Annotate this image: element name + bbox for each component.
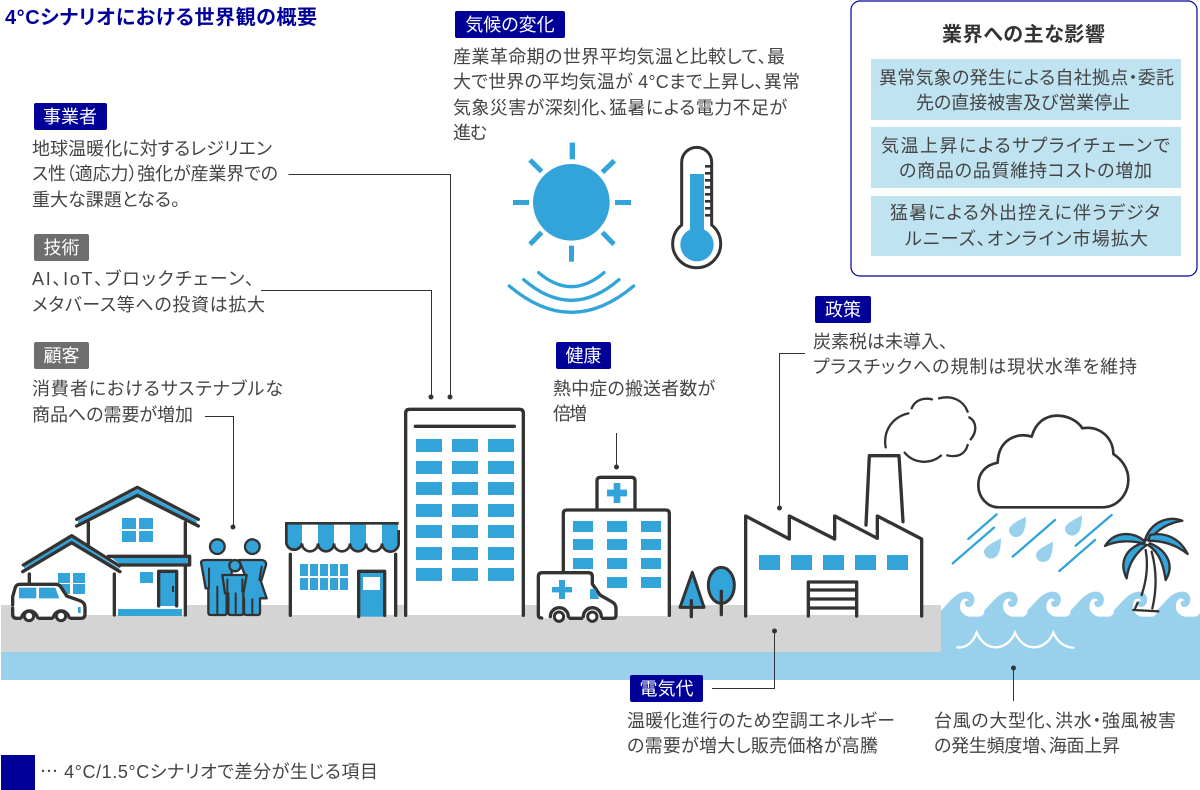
icon: palm tree [1105, 519, 1188, 611]
leader line: 電気代 [712, 628, 777, 688]
tag: 政策 [815, 296, 871, 323]
impact 3 [871, 196, 1181, 256]
panel: 顧客 [32, 342, 283, 425]
tag: 顧客 [34, 342, 89, 369]
icon: shop [286, 523, 399, 617]
text: 顧客 [32, 378, 283, 425]
text: 事業者: ス性（適応力）強化が産業界での [32, 164, 278, 184]
leader line: 健康 [614, 433, 619, 470]
leader line: 台風 [1011, 666, 1016, 701]
text: 台風: の発生頻度増、海面上昇 [934, 736, 1120, 756]
tag: 政策: 政策 [825, 300, 861, 320]
text: 気候の変化: 気象災害が深刻化、猛暑による電力不足が [453, 98, 787, 118]
tag: 健康: 健康 [566, 346, 602, 366]
impact 2: 気温上昇によるサプライチェーンで [881, 136, 1170, 156]
text: 健康: 倍増 [553, 404, 587, 424]
text: 技術: メタバース等への投資は拡大 [32, 295, 265, 315]
text: 電気代: 温暖化進行のため空調エネルギー [627, 711, 895, 731]
tag: 技術 [34, 234, 89, 261]
icon: factory [746, 397, 975, 616]
text: 政策 [813, 332, 1137, 377]
leader line: 事業者 [288, 174, 452, 400]
text: 電気代: の需要が増大し販売価格が高騰 [627, 736, 878, 756]
water band [1, 652, 1199, 680]
text: 健康: 熱中症の搬送者数が [553, 379, 715, 399]
text: 政策: プラスチックへの規制は現状水準を維持 [813, 357, 1137, 377]
text: 健康 [553, 379, 715, 424]
text: 顧客: 商品への需要が増加 [32, 405, 193, 425]
text: 事業者 [32, 139, 278, 210]
impact 3: 猛暑による外出控えに伴うデジタ [890, 203, 1160, 223]
tag: 技術: 技術 [44, 238, 80, 258]
text: 気候の変化: 大で世界の平均気温が 4°Cまで上昇し、異常 [453, 72, 800, 92]
panel: 電気代 [627, 675, 895, 756]
text: 台風 [934, 711, 1176, 756]
icon: hospital [563, 477, 669, 616]
impact 3: ルニーズ、オンライン市場拡大 [905, 229, 1148, 249]
text: 政策: 炭素税は未導入、 [813, 332, 948, 352]
panel: 政策 [813, 296, 1137, 377]
tag: 気候の変化: 気候の変化 [465, 15, 555, 35]
panel: 業界への主な影響 [851, 1, 1197, 276]
impact 1: 異常気象の発生による自社拠点・委託 [879, 68, 1174, 88]
sea and waves [941, 592, 1200, 680]
panel: 健康 [553, 342, 715, 424]
legend: ⋯ 4°C/1.5°Cシナリオで差分が生じる項目 [40, 758, 378, 784]
text: 気候の変化: 進む [453, 123, 487, 143]
panel: 気候の変化 [453, 11, 800, 143]
leader line: 技術 [261, 290, 434, 400]
text: 顧客: 消費者におけるサステナブルな [32, 378, 283, 399]
leader line: 顧客 [205, 416, 236, 530]
icon: storm cloud and rain [953, 416, 1128, 571]
tag: 健康 [556, 342, 611, 369]
legend [1, 755, 378, 790]
icon: house [23, 487, 198, 616]
impact 1 [871, 59, 1181, 120]
leader line: 政策 [777, 354, 805, 510]
icon: sun [509, 143, 634, 312]
tag: 電気代 [630, 675, 703, 702]
text: 気候の変化 [453, 47, 800, 143]
text: 事業者: 地球温暖化に対するレジリエン [32, 139, 272, 159]
icon: ambulance [538, 573, 616, 621]
panel: 事業者 [32, 103, 278, 210]
text: 技術 [32, 268, 265, 315]
tag: 事業者 [34, 103, 107, 130]
panel heading: 業界への主な影響 [942, 23, 1105, 46]
text: 事業者: 重大な課題となる。 [32, 190, 180, 210]
impact 2 [871, 127, 1181, 188]
icon: trees [680, 567, 734, 617]
icon: car [13, 584, 85, 621]
panel: 技術 [32, 234, 265, 315]
icon: family [201, 539, 267, 615]
text: 気候の変化: 産業革命期の世界平均気温と比較して、最 [453, 47, 785, 67]
text: 電気代 [627, 711, 895, 756]
tag: 電気代: 電気代 [640, 679, 694, 699]
title: 4°Cシナリオにおける世界観の概要 [5, 6, 317, 29]
tag: 顧客: 顧客 [44, 346, 80, 366]
icon: office tower [406, 409, 523, 615]
tag: 気候の変化 [455, 11, 565, 38]
impact 1: 先の直接被害及び営業停止 [916, 93, 1130, 113]
impact 2: の商品の品質維持コストの増加 [899, 161, 1152, 181]
icon: thermometer [673, 147, 721, 268]
text: 技術: AI、IoT、ブロックチェーン、 [32, 268, 254, 289]
text: 台風: 台風の大型化、洪水・強風被害 [934, 711, 1176, 731]
ground [1, 605, 941, 652]
tag: 事業者: 事業者 [43, 107, 97, 127]
